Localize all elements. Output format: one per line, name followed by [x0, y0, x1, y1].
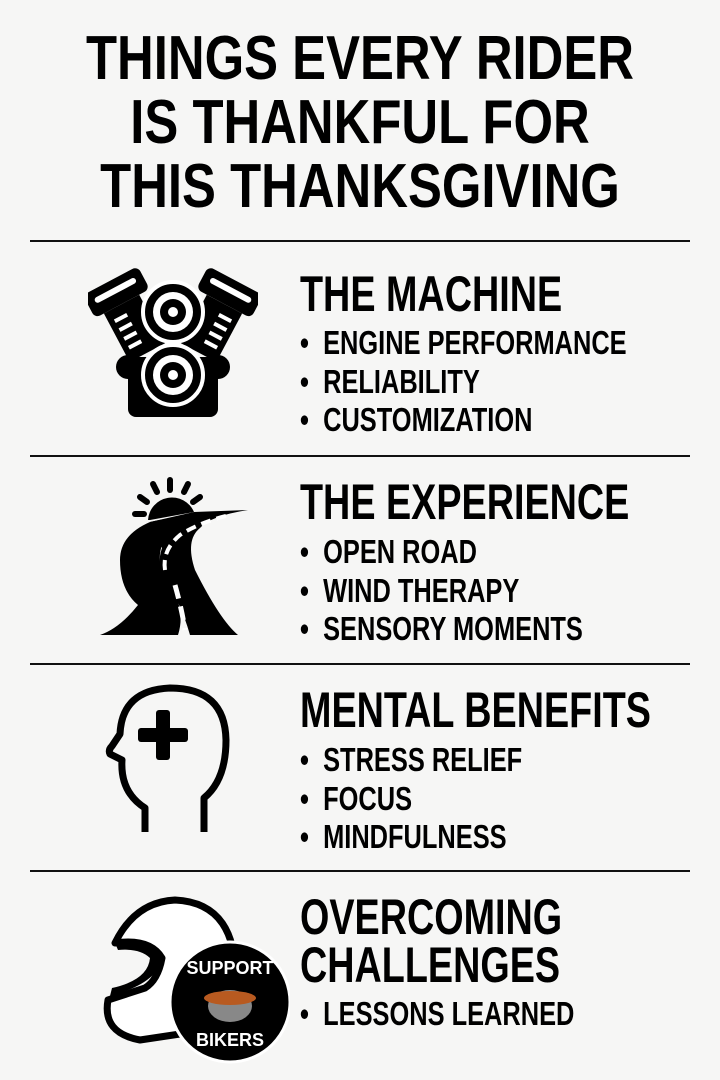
list: mental: STRESS RELIEF [323, 741, 522, 778]
section: the machine [300, 266, 627, 438]
icon: helmet with badge [104, 896, 290, 1064]
heading: overcoming challenges [300, 889, 562, 993]
section: mental benefits [300, 682, 651, 855]
icon: helmet with badge: SUPPORT [186, 958, 274, 978]
list: challenges: LESSONS LEARNED [323, 995, 574, 1032]
section: overcoming challenges [300, 889, 574, 1032]
list: experience: WIND THERAPY [323, 572, 519, 608]
title: THINGS EVERY RIDER [86, 24, 634, 93]
icon: road with sun [100, 477, 248, 635]
list: experience: SENSORY MOMENTS [323, 610, 583, 647]
icon: engine [88, 268, 258, 417]
heading: the machine: THE MACHINE [300, 266, 562, 322]
title: IS THANKFUL FOR [130, 88, 590, 157]
icon: head with plus [106, 684, 230, 832]
list: machine: RELIABILITY [323, 362, 480, 400]
heading: overcoming challenges: CHALLENGES [300, 937, 560, 993]
heading: mental benefits: MENTAL BENEFITS [300, 682, 651, 738]
icon: helmet with badge: BIKERS [196, 1030, 264, 1050]
list: mental: MINDFULNESS [323, 818, 507, 855]
list: experience [300, 533, 583, 647]
list: machine [300, 324, 627, 438]
heading: overcoming challenges: OVERCOMING [300, 889, 562, 945]
title: THIS THANKSGIVING [100, 152, 620, 221]
list: experience: OPEN ROAD [323, 533, 477, 570]
list: mental [300, 741, 522, 855]
title [86, 24, 634, 221]
heading: the experience: THE EXPERIENCE [300, 474, 629, 530]
section: the experience [300, 474, 629, 647]
list: machine: CUSTOMIZATION [323, 401, 532, 438]
list: mental: FOCUS [323, 780, 412, 816]
list: machine: ENGINE PERFORMANCE [323, 324, 627, 361]
